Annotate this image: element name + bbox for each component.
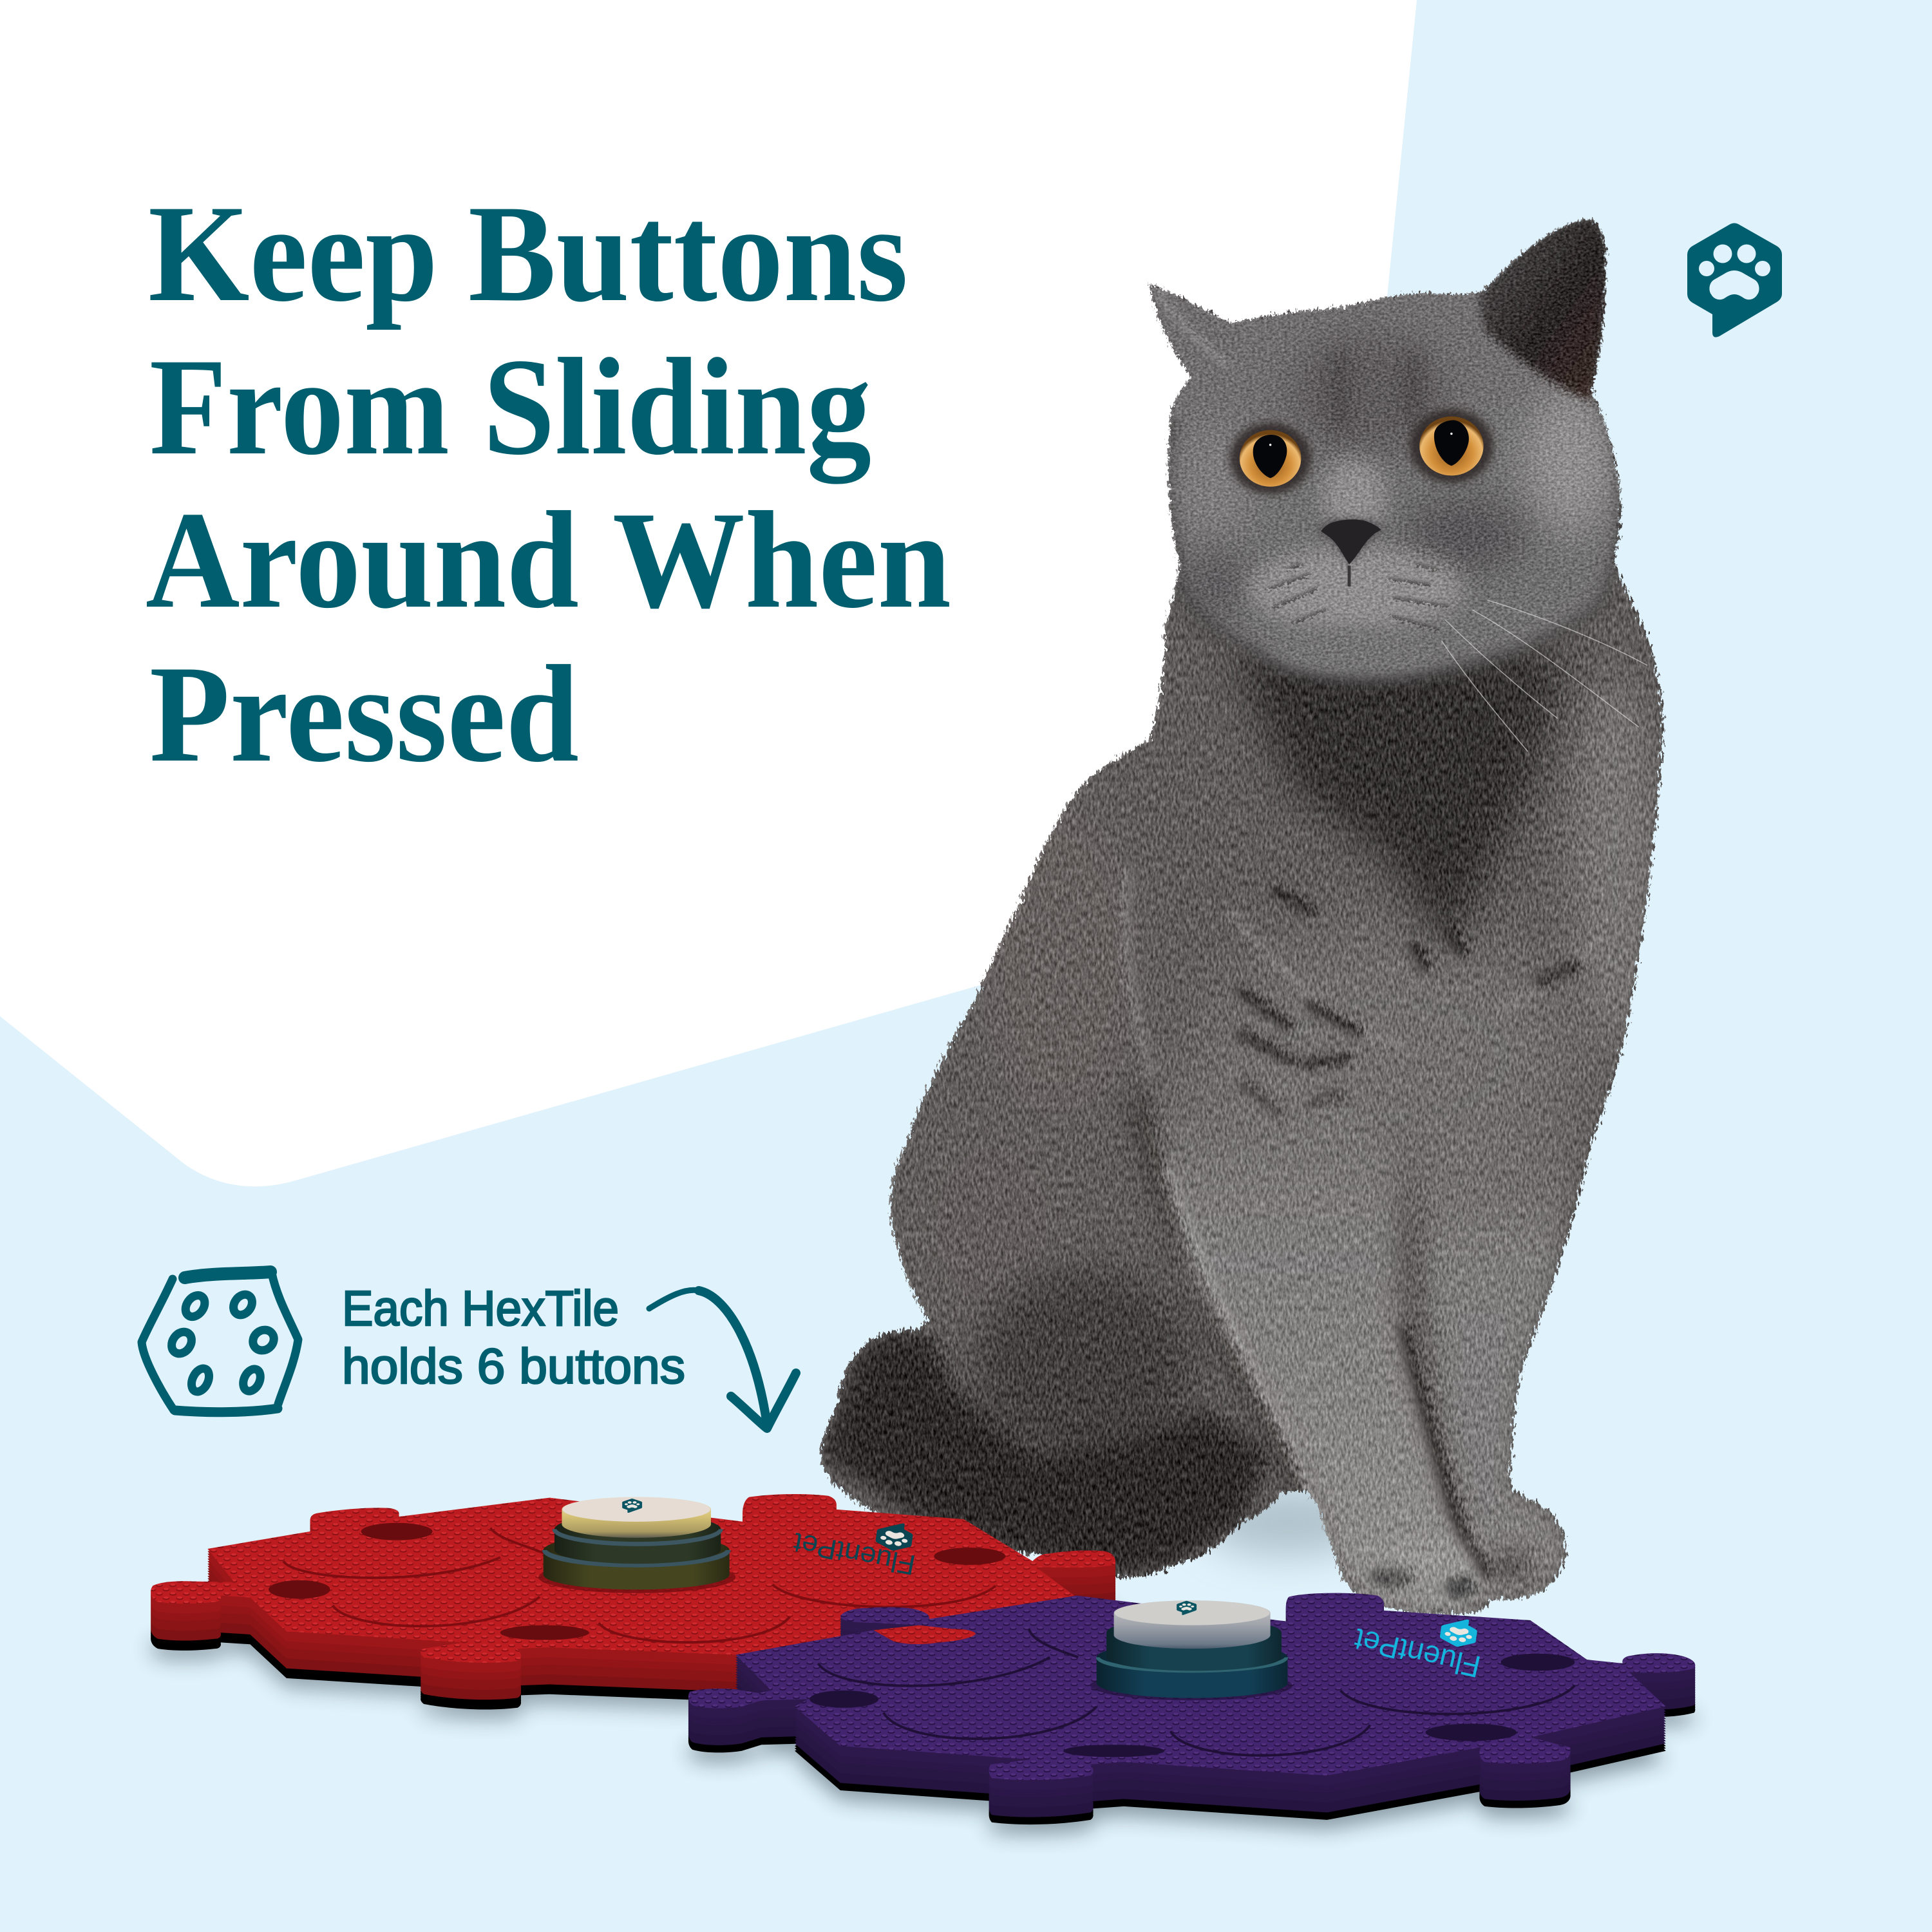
cat right front leg — [1417, 1153, 1571, 1604]
cat haunch seam shadow — [1140, 1097, 1314, 1528]
icon: hexagonal tile sketch — [142, 1272, 298, 1412]
cat chest — [1195, 924, 1589, 1195]
title: Pressed — [149, 637, 579, 791]
title: Buttons — [468, 176, 908, 330]
title: When — [612, 483, 951, 637]
caption: each HexTile holds 6 buttons — [342, 1281, 685, 1394]
cat eyes — [1229, 409, 1493, 494]
arrow pointing to mats — [649, 1290, 796, 1428]
recessed circles — [283, 1528, 996, 1642]
red tab interlocked — [874, 1625, 976, 1644]
red mat — [151, 1494, 1115, 1719]
logo: FluentPet: FluentPet — [1351, 1622, 1484, 1683]
purple button — [1090, 1600, 1293, 1700]
caption: each HexTile holds 6 buttons: Each HexTile — [342, 1281, 619, 1336]
cat head — [1150, 220, 1625, 684]
cat whiskers — [1442, 600, 1647, 752]
cat fur seams and tabby stripes — [1126, 874, 1598, 1071]
white angular panel — [0, 0, 1417, 1186]
red button — [538, 1497, 735, 1593]
title: Keep — [148, 176, 438, 330]
HexTile mats — [151, 1494, 1695, 1834]
cat floor shadow — [1201, 1487, 1374, 1556]
cat nose and mouth — [1317, 518, 1385, 587]
purple mat — [688, 1593, 1695, 1834]
cat tail — [820, 1331, 1271, 1577]
keyholes — [269, 1523, 1005, 1640]
cat ears — [1479, 220, 1605, 401]
recessed circles — [818, 1629, 1575, 1756]
title: From — [149, 330, 450, 484]
keyholes — [810, 1654, 1575, 1757]
icon: FluentPet paw speech hexagon — [1687, 223, 1782, 337]
cat whisker pad marks — [1269, 564, 1448, 629]
title: Sliding — [483, 330, 871, 484]
cat left front leg — [1146, 1044, 1491, 1615]
logo: FluentPet: FluentPet — [791, 1526, 918, 1581]
cat — [819, 217, 1667, 1615]
caption: each HexTile holds 6 buttons: holds 6 buttons — [342, 1339, 685, 1394]
cat body — [819, 217, 1667, 1615]
title: Around — [146, 483, 579, 637]
title — [146, 176, 951, 791]
